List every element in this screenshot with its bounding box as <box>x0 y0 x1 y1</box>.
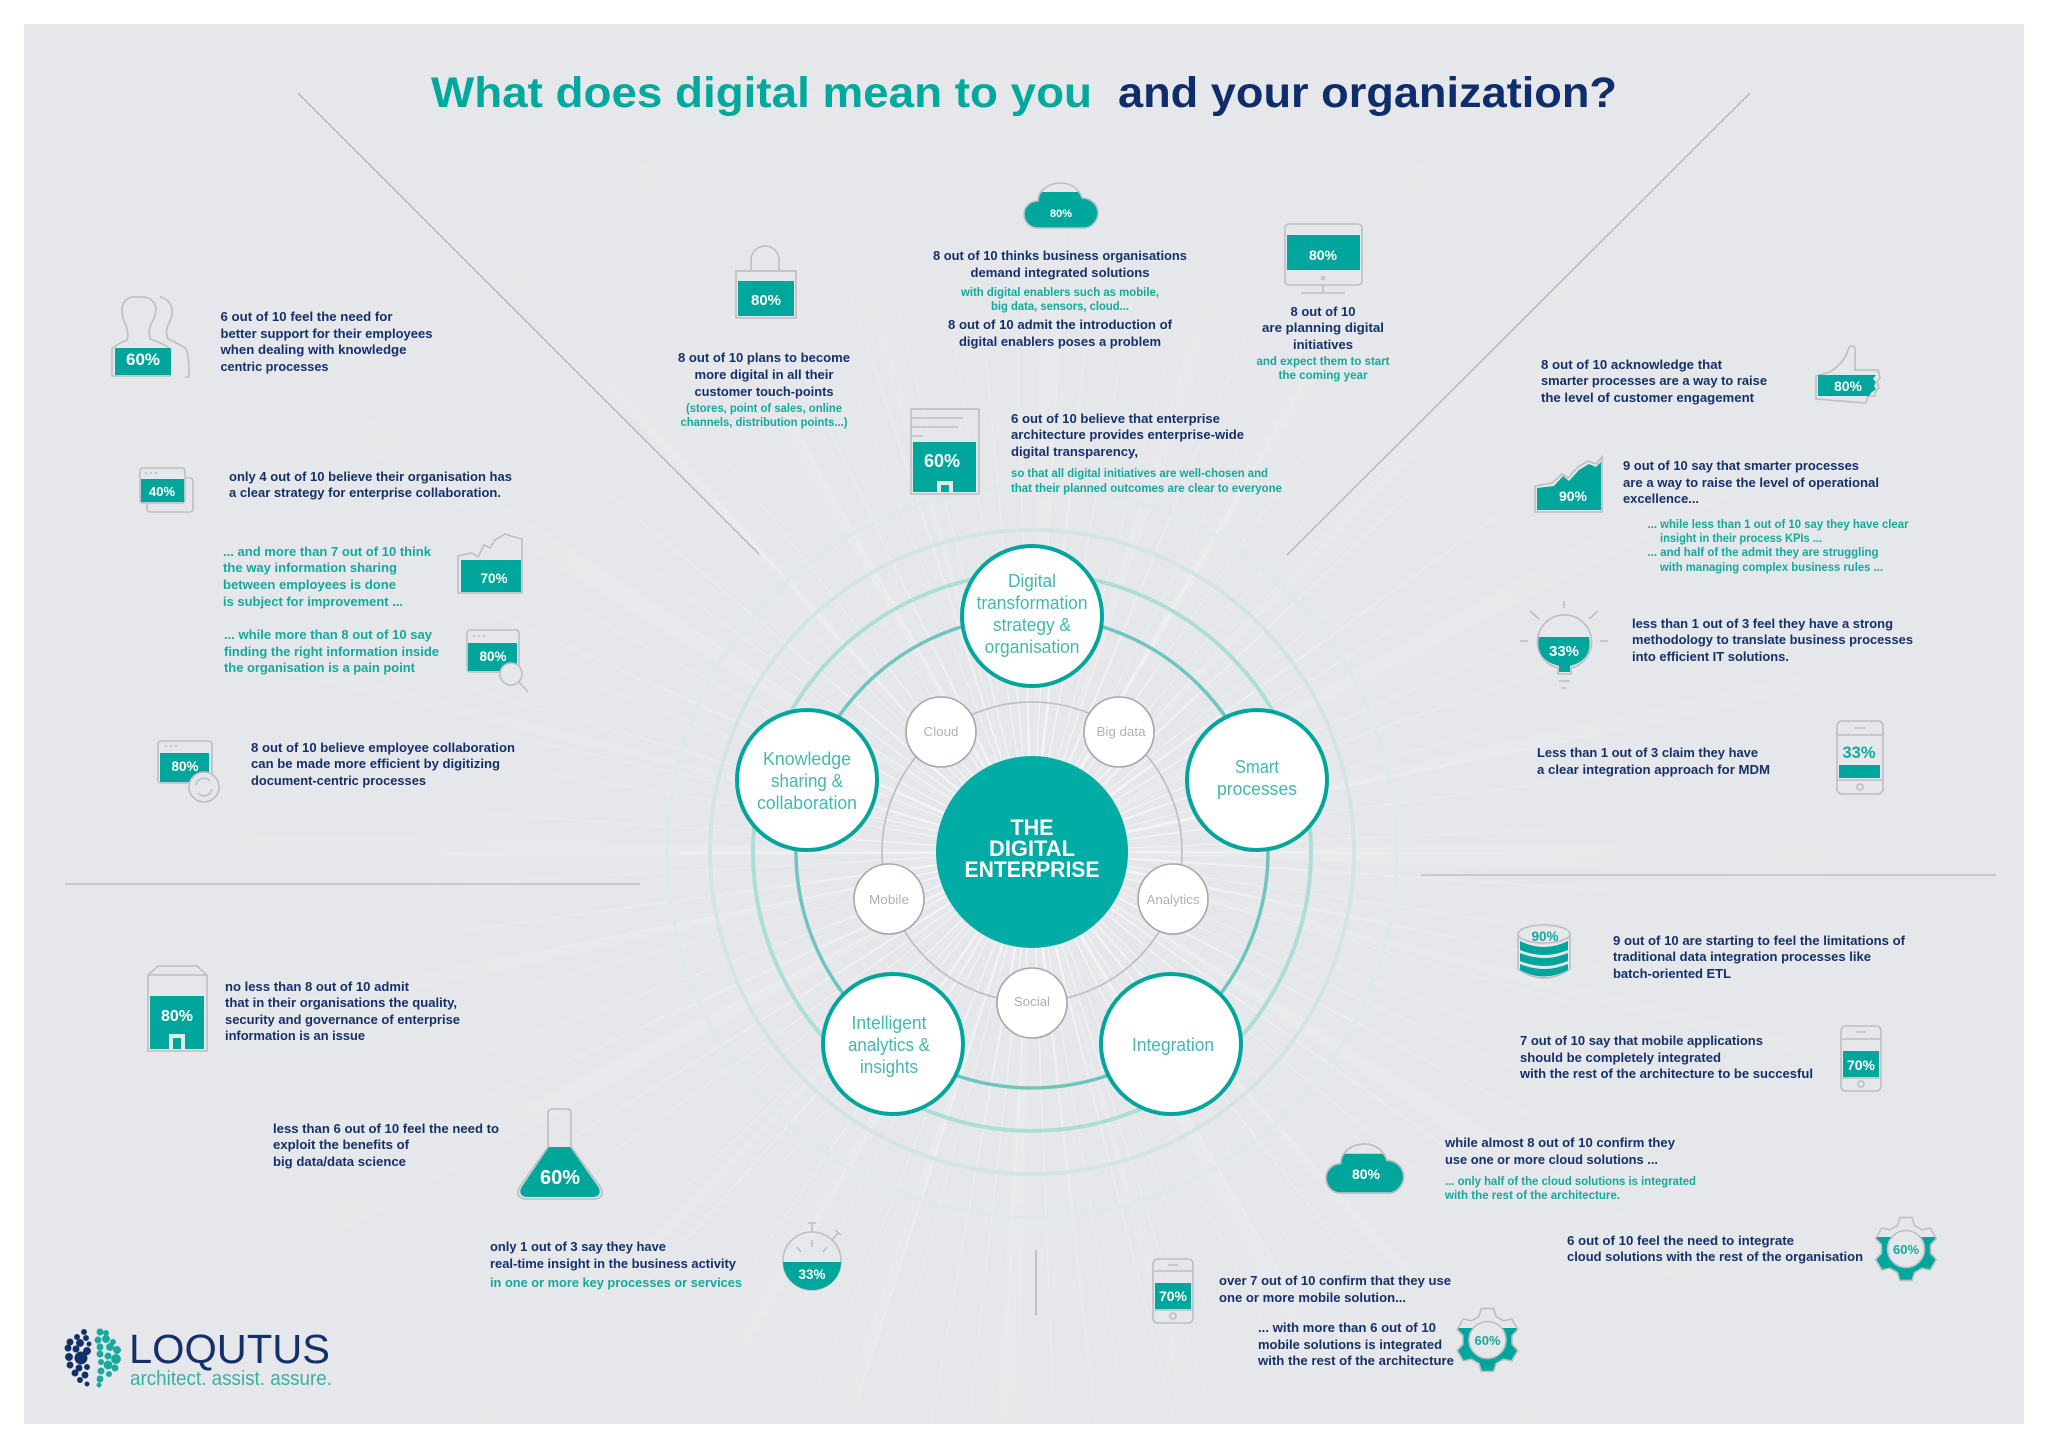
text: integrated solutions <box>933 249 1187 349</box>
text: operational excellence: are a way to raise the level of operational <box>1623 476 1879 490</box>
small node: cloud <box>906 697 976 767</box>
text: customer engagement: smarter processes are a way to raise <box>1541 374 1767 388</box>
node: knowledge sharing: sharing & <box>771 771 843 791</box>
icon: windows 40%: 40% <box>149 484 175 499</box>
text: strong methodology: methodology to translate business processes <box>1632 633 1913 647</box>
icon: thumbs up 80% <box>1816 346 1880 403</box>
logo: Loqutus <box>65 1326 332 1390</box>
node: knowledge sharing: collaboration <box>757 793 857 813</box>
text: enterprise architecture: architecture provides enterprise-wide <box>1011 428 1244 442</box>
icon: phone 70% bottom: 70% <box>1159 1288 1188 1304</box>
text: digital initiatives: 8 out of 10 <box>1290 305 1356 319</box>
node: digital transformation <box>962 546 1102 686</box>
icon: refresh window 80%: 80% <box>171 759 199 774</box>
text: mobile solutions <box>1219 1274 1454 1368</box>
text: mobile solutions: with the rest of the architecture <box>1257 1354 1454 1368</box>
text: mobile applications: 7 out of 10 say that mobile applications <box>1520 1034 1763 1048</box>
text: collaboration strategy: a clear strategy for enterprise collaboration. <box>229 486 501 500</box>
text: support for employees: 6 out of 10 feel the need for <box>220 310 393 324</box>
text: MDM approach: a clear integration approach for MDM <box>1537 763 1770 777</box>
icon: gear 60% right: 60% <box>1893 1242 1919 1257</box>
text: integrated solutions: with digital enablers such as mobile, <box>960 287 1159 299</box>
title <box>431 69 1617 117</box>
icon: gear 60% bottom <box>1457 1309 1518 1371</box>
text: MDM approach <box>1537 746 1770 777</box>
text: customer touch-points: 8 out of 10 plans to become <box>678 351 850 365</box>
text: integrated solutions: digital enablers poses a problem <box>959 335 1161 349</box>
centre circle: the digital enterprise: DIGITAL <box>989 836 1075 861</box>
text: customer engagement: 8 out of 10 acknowledge that <box>1541 358 1723 372</box>
small node: big data: Big data <box>1096 724 1146 739</box>
logo wordmark: LOQUTUS <box>129 1326 330 1372</box>
icon: thumbs up 80%: 80% <box>1834 378 1863 394</box>
text: digital initiatives: initiatives <box>1293 338 1353 352</box>
icon: search window 80%: 80% <box>479 649 507 664</box>
icon: light bulb 33% <box>1520 601 1608 688</box>
text: operational excellence: ... while less than 1 out of 10 say they have clear <box>1648 519 1909 531</box>
text: big data science: less than 6 out of 10 feel the need to <box>273 1122 499 1136</box>
text: big data science: exploit the benefits of <box>273 1138 410 1152</box>
icon: windows 40% <box>140 468 193 512</box>
icon: chart 90%: 90% <box>1559 488 1588 504</box>
text: information governance <box>225 980 460 1043</box>
icon: phone 70% <box>1841 1026 1881 1091</box>
text: finding information: finding the right information inside <box>224 645 439 659</box>
icon: chart 90% <box>1535 457 1602 512</box>
node: digital transformation: strategy & <box>993 615 1071 635</box>
text: cloud solutions: use one or more cloud solutions ... <box>1445 1153 1658 1167</box>
text: enterprise architecture: 6 out of 10 believe that enterprise <box>1011 412 1220 426</box>
icon: gear 60% right <box>1876 1218 1936 1280</box>
text: operational excellence: ... and half of the admit they are struggling <box>1648 547 1878 559</box>
centre circle: the digital enterprise <box>936 756 1128 948</box>
text: cloud solutions: with the rest of the architecture. <box>1444 1190 1620 1202</box>
icon: document 60% <box>911 409 979 494</box>
text: finding information: the organisation is a pain point <box>224 661 416 675</box>
text: enterprise architecture: so that all digital initiatives are well-chosen and <box>1011 468 1268 480</box>
node: intelligent analytics: analytics & <box>848 1035 930 1055</box>
text: cloud solutions: while almost 8 out of 10 confirm they <box>1444 1136 1675 1150</box>
node: intelligent analytics <box>823 974 963 1114</box>
icon: gear 60% bottom: 60% <box>1474 1333 1501 1348</box>
text: digital initiatives: the coming year <box>1278 370 1368 382</box>
text: support for employees <box>219 310 433 374</box>
text: strong methodology <box>1632 617 1913 664</box>
icon: building 80% <box>148 966 207 1051</box>
text: mobile applications: with the rest of the architecture to be succesful <box>1519 1067 1813 1081</box>
text: mobile applications: should be completely integrated <box>1520 1051 1721 1065</box>
text: operational excellence: excellence... <box>1623 492 1699 506</box>
icon: document 60%: 60% <box>924 451 960 471</box>
icon: light bulb 33%: 33% <box>1549 643 1579 660</box>
text: integrate cloud <box>1567 1234 1863 1264</box>
node: intelligent analytics: insights <box>860 1057 918 1077</box>
text: integrated solutions: 8 out of 10 thinks business organisations <box>933 249 1187 263</box>
text: support for employees: centric processes <box>220 360 329 374</box>
text: document-centric: document-centric processes <box>251 774 426 788</box>
title: and your organization? <box>1118 69 1617 117</box>
text: information governance: information is an issue <box>225 1029 365 1043</box>
small node: analytics <box>1138 864 1208 934</box>
icon: people 60%: 60% <box>126 350 160 369</box>
text: real-time insight: only 1 out of 3 say they have <box>490 1240 666 1254</box>
text: cloud solutions <box>1444 1136 1696 1202</box>
text: collaboration strategy: only 4 out of 10 believe their organisation has <box>229 470 512 484</box>
text: digital initiatives <box>1256 305 1390 382</box>
icon: stopwatch 33%: 33% <box>798 1267 826 1282</box>
icon: flask 60% <box>518 1109 602 1199</box>
text: operational excellence: insight in their process KPIs ... <box>1660 533 1822 545</box>
icon: shopping bag 80%: 80% <box>751 292 781 309</box>
icon: cloud 80% <box>1024 183 1098 228</box>
icon: monitor 80%: 80% <box>1309 247 1338 263</box>
small node: big data <box>1084 697 1154 767</box>
node: smart processes <box>1187 710 1327 850</box>
text: real-time insight <box>490 1240 742 1290</box>
text: digital initiatives: are planning digital <box>1262 321 1384 335</box>
text: customer touch-points: (stores, point of sales, online <box>686 403 842 415</box>
title: What does digital mean to you <box>431 69 1092 117</box>
text: integrated solutions: big data, sensors, cloud... <box>991 301 1129 313</box>
text: MDM approach: Less than 1 out of 3 claim they have <box>1537 746 1758 760</box>
icon: shopping bag 80% <box>736 246 796 318</box>
text: integrate cloud: 6 out of 10 feel the need to integrate <box>1567 1234 1794 1248</box>
text: data integration limits: batch-oriented ETL <box>1613 967 1731 981</box>
text: information sharing: ... and more than 7 out of 10 think <box>223 545 431 559</box>
text: customer touch-points <box>678 351 850 429</box>
text: real-time insight: real-time insight in the business activity <box>490 1257 736 1271</box>
node: integration <box>1101 974 1241 1114</box>
icon: monitor 80% <box>1285 224 1362 293</box>
node: digital transformation: Digital <box>1008 571 1056 591</box>
icon: cloud 80%: 80% <box>1050 208 1072 220</box>
small node: cloud: Cloud <box>924 724 958 739</box>
text: information sharing: is subject for improvement ... <box>223 595 403 609</box>
text: information governance: that in their organisations the quality, <box>225 996 457 1010</box>
text: mobile solutions: ... with more than 6 out of 10 <box>1258 1321 1436 1335</box>
text: real-time insight: in one or more key processes or services <box>490 1276 742 1290</box>
text: data integration limits <box>1613 934 1906 981</box>
text: support for employees: better support for their employees <box>220 327 433 341</box>
text: document-centric: can be made more efficient by digitizing <box>251 757 500 771</box>
icon: cloud 80% lower: 80% <box>1352 1166 1381 1182</box>
text: customer engagement <box>1541 358 1767 405</box>
text: enterprise architecture: digital transparency, <box>1011 445 1138 459</box>
text: data integration limits: traditional data integration processes like <box>1613 950 1871 964</box>
text: collaboration strategy <box>229 470 512 500</box>
text: document-centric: 8 out of 10 believe employee collaboration <box>251 741 515 755</box>
text: operational excellence: with managing complex business rules ... <box>1659 562 1883 574</box>
text: customer touch-points: customer touch-points <box>694 385 834 399</box>
icon: database 90%: 90% <box>1531 929 1559 944</box>
small node: analytics: Analytics <box>1146 892 1200 907</box>
text: integrated solutions: 8 out of 10 admit the introduction of <box>948 318 1173 332</box>
text: cloud solutions: ... only half of the cloud solutions is integrated <box>1445 1176 1696 1188</box>
small node: social: Social <box>1014 994 1050 1009</box>
icon: people 60% <box>112 297 189 377</box>
text: operational excellence: 9 out of 10 say that smarter processes <box>1623 459 1859 473</box>
central hub diagram <box>710 530 1354 1174</box>
icon: flask 60%: 60% <box>540 1167 580 1189</box>
text: information governance: security and governance of enterprise <box>225 1013 460 1027</box>
text: customer touch-points: channels, distribution points...) <box>680 417 848 429</box>
text: operational excellence <box>1623 459 1909 574</box>
logo mark: dots <box>65 1329 120 1387</box>
text: digital initiatives: and expect them to start <box>1256 356 1390 368</box>
node: smart processes: Smart <box>1235 757 1279 777</box>
icon: building 80%: 80% <box>161 1008 193 1025</box>
text: enterprise architecture: that their planned outcomes are clear to everyone <box>1011 483 1282 495</box>
icon: chart 70%: 70% <box>480 571 508 586</box>
small node: mobile <box>854 864 924 934</box>
node: knowledge sharing: Knowledge <box>763 749 851 769</box>
text: integrate cloud: cloud solutions with the rest of the organisation <box>1567 1250 1863 1264</box>
text: customer touch-points: more digital in all their <box>694 368 834 382</box>
text: information sharing: the way information sharing <box>223 561 397 575</box>
icon: phone 33%: 33% <box>1842 744 1876 762</box>
text: mobile solutions: over 7 out of 10 confirm that they use <box>1219 1274 1451 1288</box>
icon: chart 70% <box>458 534 522 593</box>
text: customer engagement: the level of customer engagement <box>1541 391 1755 405</box>
text: finding information <box>224 628 439 675</box>
text: support for employees: when dealing with knowledge <box>219 343 407 357</box>
small node: social <box>997 968 1067 1038</box>
text: mobile applications <box>1519 1034 1813 1081</box>
node: knowledge sharing <box>737 710 877 850</box>
text: information sharing: between employees is done <box>223 578 396 592</box>
icon: phone 33% <box>1837 721 1883 794</box>
text: finding information: ... while more than 8 out of 10 say <box>224 628 432 642</box>
text: big data science: big data/data science <box>273 1155 406 1169</box>
icon: phone 70%: 70% <box>1847 1057 1876 1073</box>
text: strong methodology: less than 1 out of 3 feel they have a strong <box>1632 617 1893 631</box>
text: mobile solutions: mobile solutions is integrated <box>1258 1338 1442 1352</box>
text: integrated solutions: demand integrated solutions <box>970 266 1150 280</box>
node: digital transformation: organisation <box>984 637 1080 657</box>
text: information sharing <box>223 545 431 609</box>
node: integration: Integration <box>1132 1035 1214 1055</box>
node: intelligent analytics: Intelligent <box>852 1013 926 1033</box>
icon: search window 80% <box>467 630 528 692</box>
small node: mobile: Mobile <box>869 892 909 907</box>
icon: cloud 80% lower <box>1326 1144 1404 1193</box>
text: mobile solutions: one or more mobile solution... <box>1219 1291 1406 1305</box>
text: data integration limits: 9 out of 10 are starting to feel the limitations of <box>1613 934 1906 948</box>
text: strong methodology: into efficient IT solutions. <box>1632 650 1789 664</box>
icon: phone 70% bottom <box>1153 1259 1193 1323</box>
icon: stopwatch 33% <box>783 1223 841 1290</box>
text: document-centric <box>251 741 515 788</box>
node: digital transformation: transformation <box>976 593 1088 613</box>
text: enterprise architecture <box>1011 412 1282 495</box>
centre circle: the digital enterprise: THE <box>1010 815 1054 840</box>
node: smart processes: processes <box>1217 779 1297 799</box>
centre circle: the digital enterprise: ENTERPRISE <box>964 857 1100 882</box>
icon: database 90% <box>1518 925 1570 978</box>
text: information governance: no less than 8 out of 10 admit <box>225 980 410 994</box>
logo tagline: architect. assist. assure. <box>130 1368 332 1390</box>
text: big data science <box>273 1122 499 1169</box>
icon: refresh window 80% <box>158 741 219 802</box>
